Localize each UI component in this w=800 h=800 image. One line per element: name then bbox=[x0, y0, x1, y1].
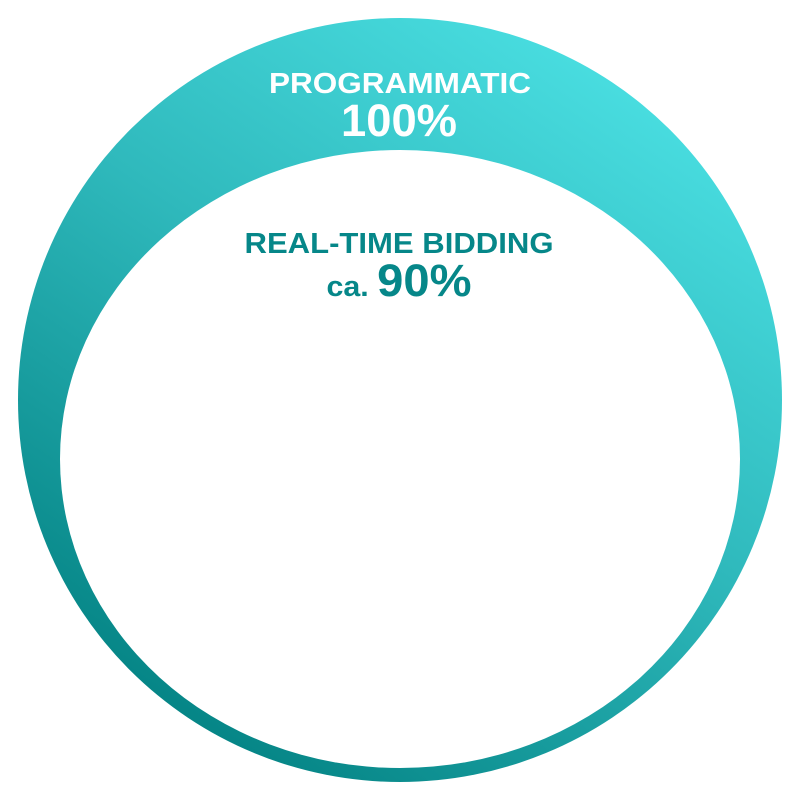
label: real-time bidding: REAL-TIME BIDDING bbox=[244, 228, 554, 260]
value: 100%: 100% bbox=[341, 95, 457, 146]
label: programmatic: PROGRAMMATIC bbox=[269, 68, 531, 100]
inner ellipse: real-time bidding bbox=[60, 150, 740, 768]
value: ca. 90%: ca. 90% bbox=[326, 255, 472, 306]
